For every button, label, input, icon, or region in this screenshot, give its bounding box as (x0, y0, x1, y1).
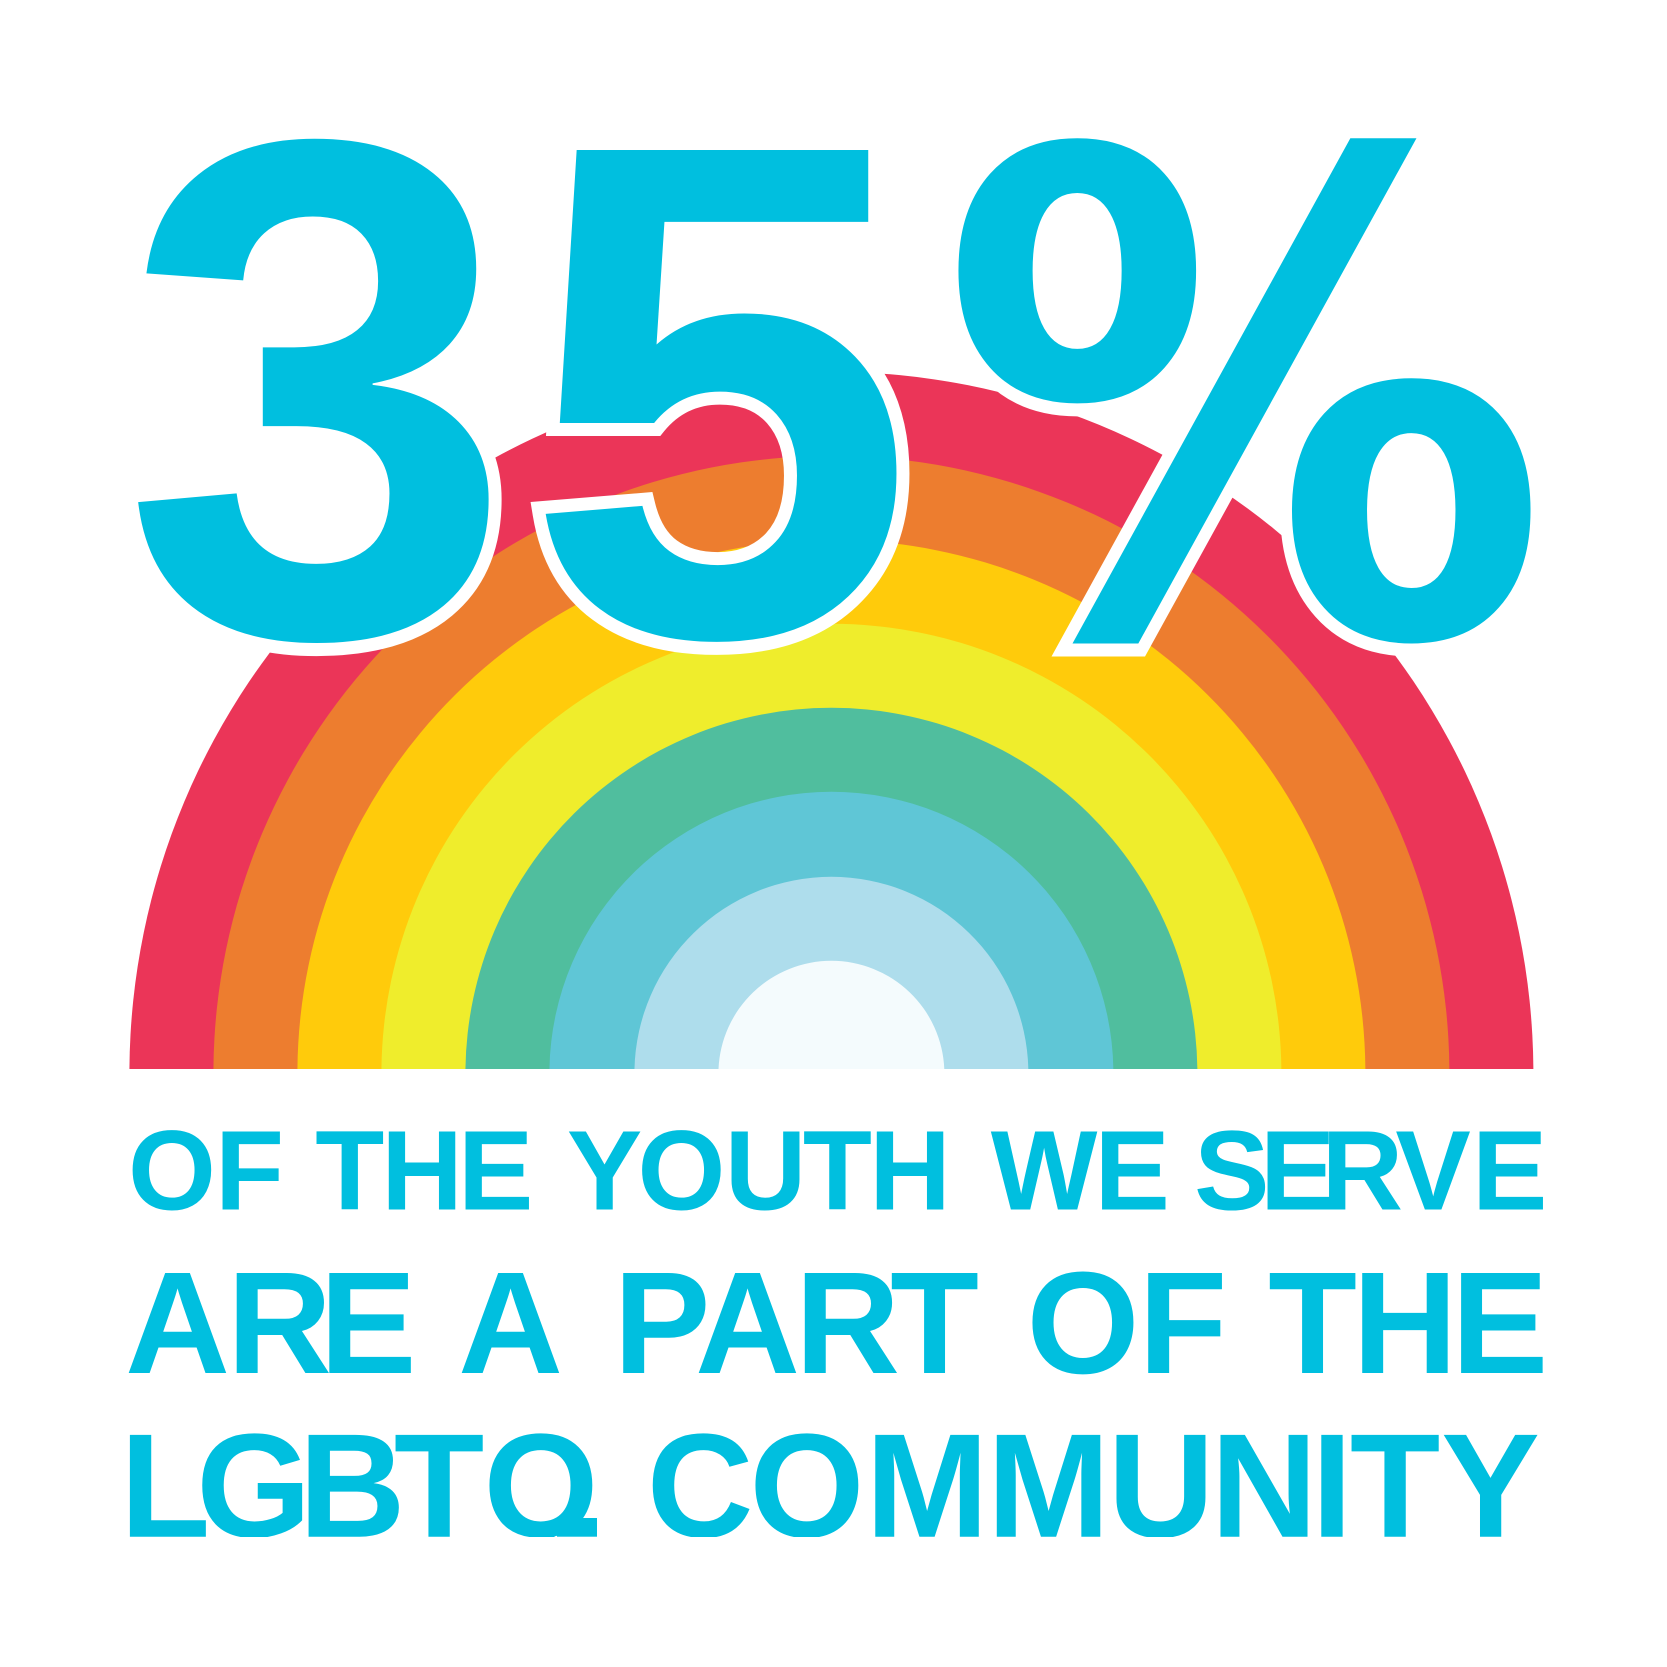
caption line 3: LGBTQ COMMUNITY (120, 1404, 1540, 1569)
band: yellow (297, 540, 1365, 1069)
band: light blue (634, 877, 1028, 1069)
percent sign: % (939, 14, 1550, 792)
band: pale centre (718, 961, 944, 1069)
caption (128, 1130, 1543, 1537)
band: teal (549, 792, 1113, 1069)
headline: 35% (122, 0, 1550, 792)
band: lemon (381, 624, 1281, 1069)
Q tail (557, 1518, 597, 1537)
digit 3: 3 (122, 0, 514, 786)
infographic canvas (128, 138, 1543, 1537)
caption line 1: OF THE YOUTH WE SERVE (128, 1108, 1547, 1234)
rainbow (129, 372, 1533, 1069)
band: orange (213, 456, 1449, 1069)
caption line 2: ARE A PART OF THE (125, 1241, 1548, 1404)
band: red (129, 372, 1533, 1069)
band: green (465, 708, 1197, 1069)
digit 5: 5 (524, 0, 916, 785)
